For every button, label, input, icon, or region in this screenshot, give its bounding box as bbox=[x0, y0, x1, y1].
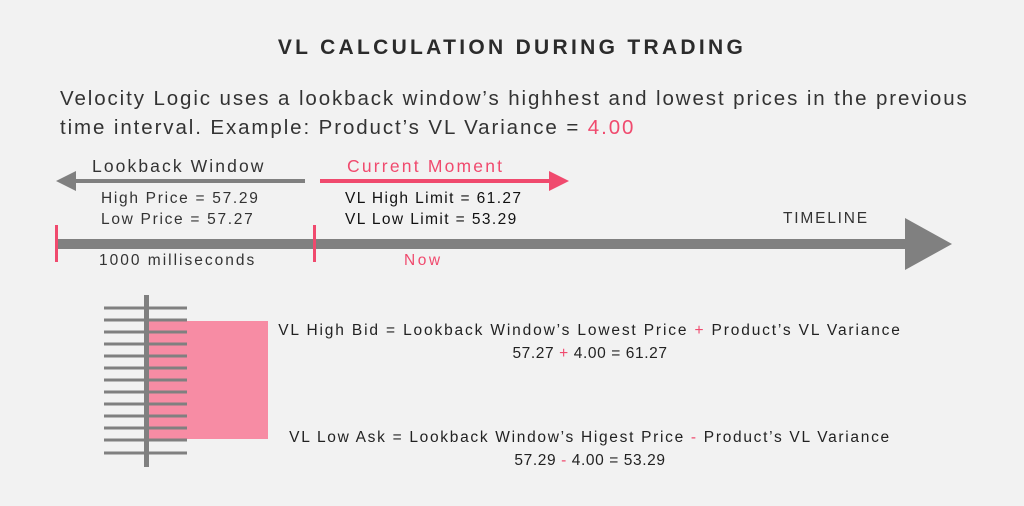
VL limits bbox=[345, 190, 522, 228]
label: now: Now bbox=[404, 252, 443, 269]
subtitle text bbox=[60, 87, 969, 139]
label: lookback window: Lookback Window bbox=[92, 156, 266, 176]
arrow: timeline bbox=[56, 218, 952, 270]
lookback prices: Low Price = 57.27 bbox=[101, 211, 254, 228]
formula: low ask: 57.29 - 4.00 = 53.29 bbox=[514, 452, 666, 469]
VL limits: VL High Limit = 61.27 bbox=[345, 190, 522, 207]
label: current moment: Current Moment bbox=[347, 156, 504, 176]
tick marks bbox=[55, 225, 316, 262]
formula: high bid: 57.27 + 4.00 = 61.27 bbox=[512, 345, 668, 362]
arrow: lookback bbox=[56, 171, 305, 191]
label: 1000 ms: 1000 milliseconds bbox=[99, 252, 256, 269]
lookback prices: High Price = 57.29 bbox=[101, 190, 260, 207]
label: timeline: TIMELINE bbox=[783, 210, 869, 227]
lookback prices bbox=[101, 190, 260, 228]
formula: low ask bbox=[289, 429, 891, 469]
VL limits: VL Low Limit = 53.29 bbox=[345, 211, 518, 228]
formula: high bid bbox=[278, 322, 902, 362]
subtitle text: time interval. Example: Product’s VL Variance = 4.00 bbox=[60, 116, 635, 139]
ladder icon with pink range bbox=[104, 295, 268, 467]
arrow: current moment bbox=[320, 171, 569, 191]
title: VL CALCULATION DURING TRADING bbox=[278, 36, 746, 59]
formula: high bid: VL High Bid = Lookback Window’s Lowest Price + Product’s VL Variance bbox=[278, 322, 902, 339]
formula: low ask: VL Low Ask = Lookback Window’s Higest Price - Product’s VL Variance bbox=[289, 429, 891, 446]
subtitle text: Velocity Logic uses a lookback window’s highhest and lowest prices in the previous bbox=[60, 87, 969, 110]
